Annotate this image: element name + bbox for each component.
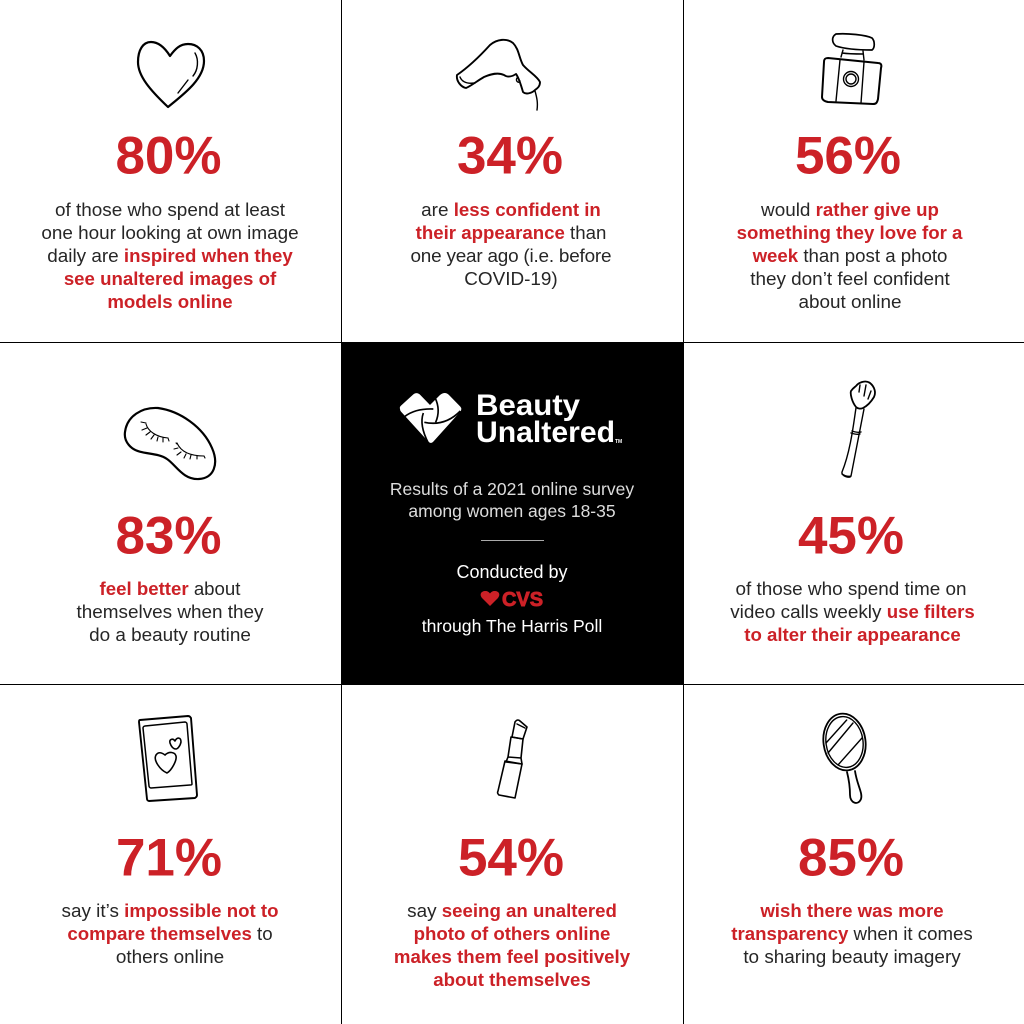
text: 80% description: daily are inspired when they bbox=[47, 245, 293, 267]
text: 56% description: week than post a photo bbox=[753, 245, 947, 266]
text: 80% description: one hour looking at own image bbox=[41, 223, 299, 244]
text: 34% description: their appearance than bbox=[416, 222, 606, 243]
text: 71% description: compare themselves to bbox=[67, 923, 273, 944]
statistic: 45%: 45% bbox=[798, 506, 904, 566]
icon: hand mirror bbox=[820, 711, 869, 803]
text: survey description: among women ages 18-35 bbox=[408, 501, 616, 521]
text: 34% description: one year ago (i.e. before bbox=[410, 246, 612, 267]
text: 80% description: models online bbox=[107, 291, 233, 312]
logo: CVS bbox=[481, 589, 543, 611]
text: 34% description: are less confident in bbox=[421, 199, 601, 221]
text: 54% description: about themselves bbox=[433, 969, 591, 990]
divider line bbox=[481, 540, 544, 541]
text: 54% description: photo of others online bbox=[414, 923, 610, 944]
icon: sleep mask bbox=[125, 408, 215, 479]
panel: 85% wish more transparency bbox=[731, 711, 973, 968]
panel: 54% feel positively bbox=[394, 720, 631, 990]
panel: 56% give up something bbox=[737, 34, 963, 313]
panel: 80% inspired by unaltered images bbox=[41, 42, 299, 312]
text: through The Harris Poll: through The Harris Poll bbox=[422, 616, 602, 636]
text: survey description: Results of a 2021 online survey bbox=[390, 479, 634, 499]
statistic: 71%: 71% bbox=[116, 828, 222, 888]
panel: 45% use filters bbox=[730, 382, 975, 645]
statistic: 54%: 54% bbox=[458, 828, 564, 888]
text: 83% description: feel better about bbox=[100, 578, 240, 599]
logo wordmark: Beauty bbox=[476, 389, 580, 422]
panel: 34% less confident bbox=[410, 40, 612, 290]
icon: hair dryer bbox=[457, 40, 540, 110]
text: 80% description: see unaltered images of bbox=[64, 268, 277, 289]
text: 45% description: to alter their appearance bbox=[744, 624, 961, 645]
text: conducted by: Conducted by bbox=[456, 562, 568, 582]
text: 85% description: wish there was more bbox=[759, 900, 944, 921]
text: 54% description: say seeing an unaltered bbox=[407, 900, 617, 922]
text: 80% description: of those who spend at least bbox=[55, 200, 286, 221]
panel: 83% feel better bbox=[77, 408, 264, 646]
text: 83% description: do a beauty routine bbox=[89, 625, 251, 646]
text: 56% description: something they love for a bbox=[737, 222, 963, 243]
text: 45% description: of those who spend time on bbox=[735, 579, 967, 600]
text: 56% description: would rather give up bbox=[761, 199, 939, 221]
text: 45% description: video calls weekly use filters bbox=[730, 601, 975, 623]
logo wordmark: Unaltered bbox=[476, 416, 615, 449]
statistic: 34%: 34% bbox=[457, 126, 563, 186]
text: 34% description: COVID-19) bbox=[464, 269, 558, 290]
icon: lipstick bbox=[498, 720, 527, 798]
text: 85% description: transparency when it comes bbox=[731, 923, 973, 944]
text: 56% description: about online bbox=[799, 292, 901, 313]
text: 56% description: they don’t feel confident bbox=[750, 269, 951, 290]
logo wordmark bbox=[476, 389, 622, 449]
statistic: 56%: 56% bbox=[795, 126, 901, 186]
statistic: 80%: 80% bbox=[115, 126, 222, 186]
logo wordmark: TM bbox=[615, 439, 622, 445]
text: 54% description: makes them feel positively bbox=[394, 946, 631, 967]
icon: makeup brush bbox=[842, 382, 875, 477]
text: 71% description: others online bbox=[116, 947, 224, 968]
text: 71% description: say it’s impossible not to bbox=[62, 900, 278, 922]
icon: heart bbox=[138, 42, 204, 107]
statistic: 83%: 83% bbox=[115, 506, 222, 566]
icon: perfume bottle bbox=[822, 34, 881, 104]
panel: 71% impossible not to compare bbox=[62, 716, 278, 968]
text: 83% description: themselves when they bbox=[77, 602, 264, 623]
panel: Beauty Unaltered survey information bbox=[342, 343, 683, 684]
logo: CVS: CVS bbox=[502, 589, 543, 611]
statistic: 85%: 85% bbox=[798, 828, 904, 888]
text: 85% description: to sharing beauty imagery bbox=[743, 947, 961, 968]
logo: Beauty Unaltered shutter heart bbox=[400, 393, 461, 443]
icon: photo with hearts bbox=[139, 716, 197, 801]
